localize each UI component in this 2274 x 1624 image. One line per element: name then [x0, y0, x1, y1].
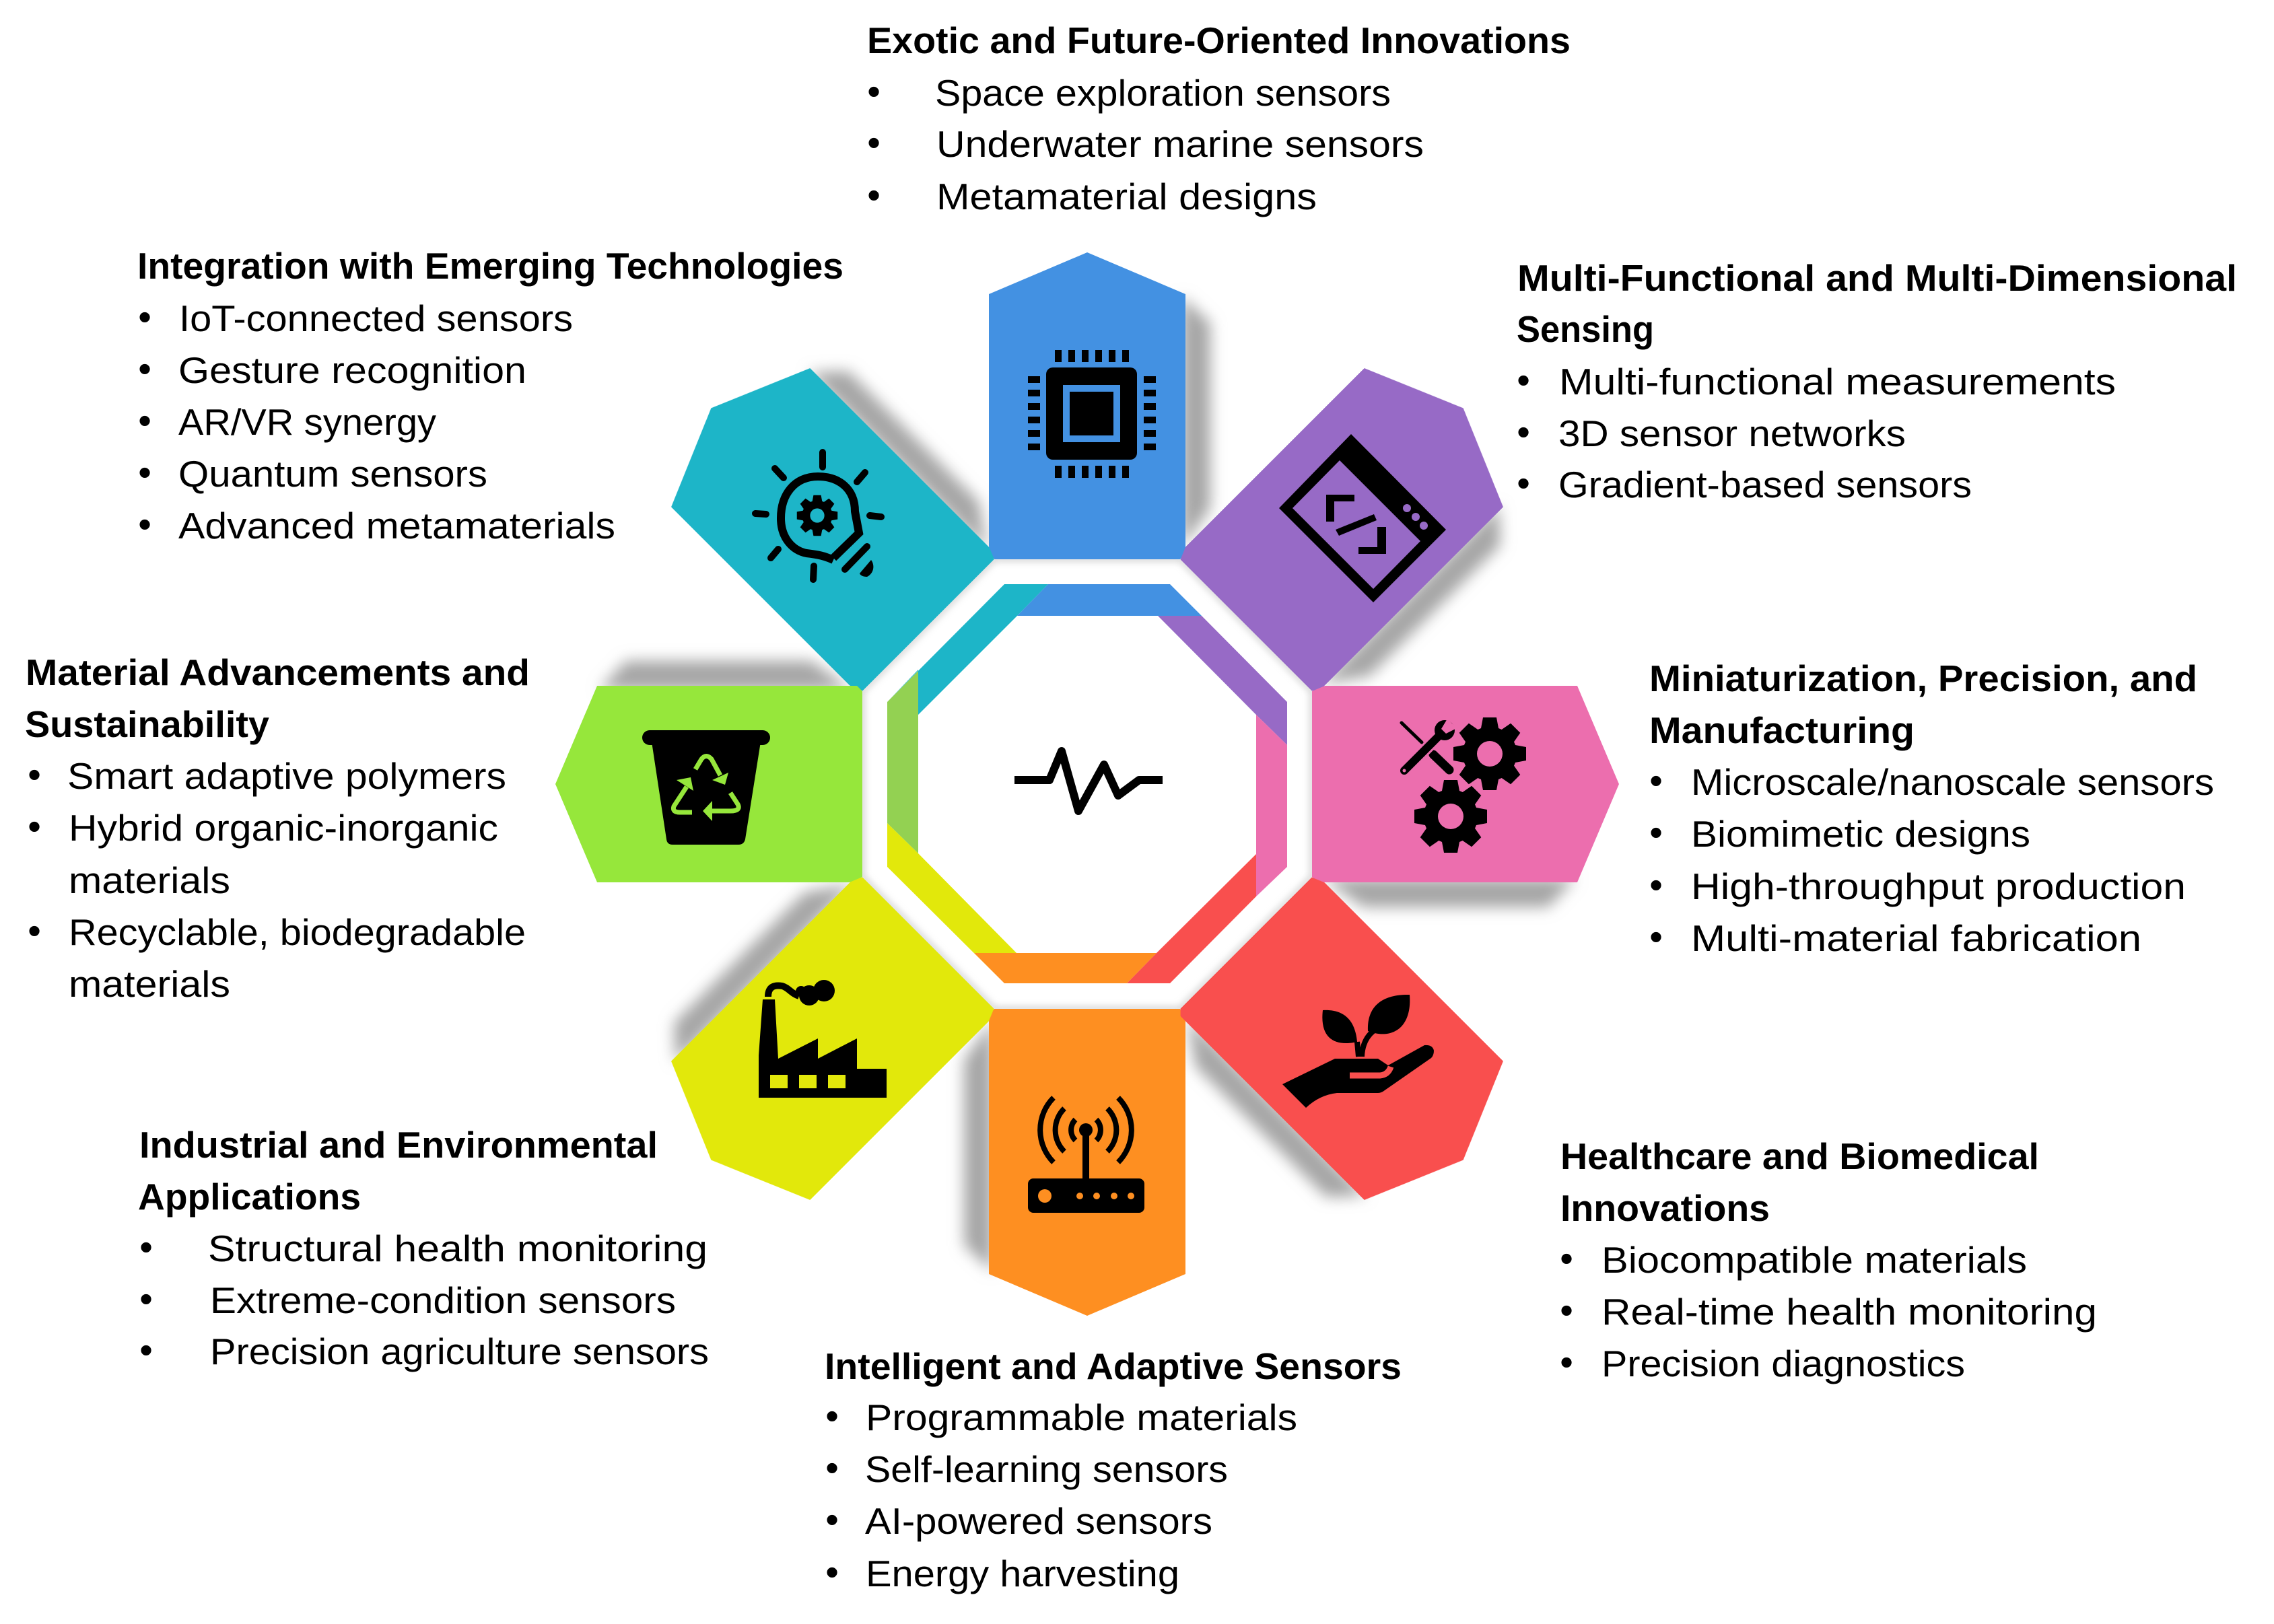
- text block: Material Advancements and Sustainability: •: [28, 805, 41, 847]
- text block: Exotic and Future-Oriented Innovations: [867, 20, 1571, 217]
- text block: Integration with Emerging Technologies: •: [138, 451, 151, 493]
- text block: Integration with Emerging Technologies: •: [138, 399, 151, 442]
- text block: Integration with Emerging Technologies: •: [138, 295, 151, 338]
- text block: Miniaturization, Precision, and Manufacturing: Multi-material fabrication: [1691, 917, 2141, 959]
- text block: Healthcare and Biomedical Innovations: Healthcare and Biomedical: [1560, 1135, 2039, 1177]
- text block: Material Advancements and Sustainability: Sustainability: [25, 703, 269, 745]
- text block: Intelligent and Adaptive Sensors: Intelligent and Adaptive Sensors: [825, 1345, 1402, 1387]
- text block: Industrial and Environmental Applications: Precision agriculture sensors: [210, 1331, 709, 1372]
- text block: Healthcare and Biomedical Innovations: •: [1560, 1341, 1573, 1383]
- text block: Integration with Emerging Technologies: Integration with Emerging Technologies: [137, 245, 843, 287]
- text block: Exotic and Future-Oriented Innovations: Exotic and Future-Oriented Innovations: [867, 20, 1571, 61]
- text block: Miniaturization, Precision, and Manufacturing: Microscale/nanoscale sensors: [1691, 761, 2214, 803]
- text block: Healthcare and Biomedical Innovations: Precision diagnostics: [1601, 1343, 1965, 1384]
- text block: Multi-Functional and Multi-Dimensional Sensing: •: [1517, 359, 1530, 401]
- icon: code window: [1279, 434, 1446, 602]
- text block: Exotic and Future-Oriented Innovations: Underwater marine sensors: [936, 123, 1424, 165]
- text block: Intelligent and Adaptive Sensors: •: [825, 1498, 839, 1541]
- text block: Intelligent and Adaptive Sensors: •: [825, 1446, 839, 1489]
- text block: Healthcare and Biomedical Innovations: Innovations: [1560, 1187, 1770, 1229]
- icon: wireless router: [1028, 1098, 1144, 1213]
- text block: Miniaturization, Precision, and Manufacturing: •: [1649, 863, 1663, 906]
- tile: yellow: [642, 874, 998, 1230]
- text block: Miniaturization, Precision, and Manufacturing: Manufacturing: [1649, 709, 1915, 751]
- icon: recycling bin: [642, 730, 770, 845]
- text block: Industrial and Environmental Applications: Extreme-condition sensors: [210, 1279, 676, 1321]
- icon: microchip: [1028, 350, 1156, 478]
- text block: Multi-Functional and Multi-Dimensional Sensing: •: [1517, 462, 1530, 504]
- tile: pink: [1312, 686, 1619, 882]
- text block: Healthcare and Biomedical Innovations: Real-time health monitoring: [1601, 1291, 2097, 1333]
- text block: Miniaturization, Precision, and Manufacturing: High-throughput production: [1691, 866, 2186, 907]
- text block: Exotic and Future-Oriented Innovations: •: [867, 174, 881, 216]
- text block: Industrial and Environmental Applications: •: [139, 1226, 153, 1268]
- text block: Material Advancements and Sustainability: Smart adaptive polymers: [67, 755, 506, 797]
- text block: Multi-Functional and Multi-Dimensional Sensing: Sensing: [1517, 308, 1654, 350]
- text block: Intelligent and Adaptive Sensors: Energy harvesting: [866, 1553, 1179, 1594]
- text block: Miniaturization, Precision, and Manufacturing: •: [1649, 811, 1663, 853]
- tile: green: [555, 686, 862, 882]
- text block: Material Advancements and Sustainability: Recyclable, biodegradable: [69, 911, 526, 953]
- text block: Material Advancements and Sustainability: •: [28, 909, 41, 952]
- text block: Integration with Emerging Technologies: Advanced metamaterials: [178, 505, 615, 546]
- text block: Industrial and Environmental Applications: •: [139, 1277, 153, 1320]
- icon: plant in hand: [1282, 995, 1434, 1108]
- text block: Integration with Emerging Technologies: •: [138, 347, 151, 390]
- text block: Industrial and Environmental Applications: Industrial and Environmental: [139, 1124, 658, 1166]
- icon: tools and gears: [1402, 717, 1526, 853]
- text block: Exotic and Future-Oriented Innovations: •: [867, 70, 881, 112]
- text block: Intelligent and Adaptive Sensors: AI-powered sensors: [865, 1500, 1212, 1542]
- tile: red: [1177, 874, 1533, 1230]
- text block: Integration with Emerging Technologies: IoT-connected sensors: [179, 297, 573, 339]
- text block: Material Advancements and Sustainability: materials: [69, 859, 230, 901]
- text block: Industrial and Environmental Applications: Applications: [138, 1176, 361, 1217]
- tile: purple: [1177, 339, 1533, 695]
- text block: Healthcare and Biomedical Innovations: [1560, 1135, 2097, 1384]
- text block: Integration with Emerging Technologies: AR/VR synergy: [178, 401, 437, 443]
- text block: Healthcare and Biomedical Innovations: •: [1560, 1237, 1573, 1279]
- text block: Integration with Emerging Technologies: •: [138, 503, 151, 545]
- text block: Healthcare and Biomedical Innovations: Biocompatible materials: [1601, 1239, 2027, 1281]
- text block: Intelligent and Adaptive Sensors: Self-learning sensors: [865, 1448, 1228, 1490]
- text block: Material Advancements and Sustainability: Material Advancements and: [26, 651, 530, 693]
- tile: blue: [989, 252, 1185, 559]
- text block: Material Advancements and Sustainability: Hybrid organic-inorganic: [69, 807, 498, 849]
- text block: Exotic and Future-Oriented Innovations: Space exploration sensors: [935, 72, 1391, 114]
- tile: teal: [642, 339, 998, 695]
- text block: Industrial and Environmental Applications: •: [139, 1329, 153, 1371]
- text block: Intelligent and Adaptive Sensors: •: [825, 1551, 839, 1593]
- text block: Healthcare and Biomedical Innovations: •: [1560, 1289, 1573, 1331]
- panel: inner octagon ring: [887, 584, 1287, 983]
- text block: Miniaturization, Precision, and Manufacturing: •: [1649, 759, 1663, 802]
- text block: Miniaturization, Precision, and Manufacturing: Miniaturization, Precision, and: [1649, 658, 2197, 699]
- text block: Material Advancements and Sustainability: •: [28, 753, 41, 796]
- text block: Miniaturization, Precision, and Manufacturing: [1649, 658, 2214, 959]
- text block: Integration with Emerging Technologies: Gesture recognition: [178, 349, 526, 391]
- icon: heartbeat pulse: [1014, 751, 1163, 811]
- text block: Multi-Functional and Multi-Dimensional Sensing: [1517, 257, 2237, 505]
- text block: Multi-Functional and Multi-Dimensional Sensing: •: [1517, 411, 1530, 453]
- text block: Miniaturization, Precision, and Manufacturing: •: [1649, 915, 1663, 958]
- icon: idea bulb with gear: [755, 452, 881, 579]
- text block: Multi-Functional and Multi-Dimensional Sensing: Gradient-based sensors: [1558, 464, 1972, 505]
- text block: Miniaturization, Precision, and Manufacturing: Biomimetic designs: [1691, 813, 2030, 855]
- text block: Intelligent and Adaptive Sensors: Programmable materials: [866, 1397, 1297, 1438]
- text block: Integration with Emerging Technologies: [137, 245, 843, 546]
- text block: Multi-Functional and Multi-Dimensional Sensing: 3D sensor networks: [1558, 413, 1906, 454]
- text block: Industrial and Environmental Applications: [138, 1124, 709, 1372]
- text block: Intelligent and Adaptive Sensors: [825, 1345, 1402, 1594]
- text block: Integration with Emerging Technologies: Quantum sensors: [178, 453, 487, 495]
- panel: wheel tiles: [555, 252, 1619, 1316]
- text block: Multi-Functional and Multi-Dimensional Sensing: Multi-functional measurements: [1559, 361, 2116, 402]
- text block: Industrial and Environmental Applications: Structural health monitoring: [208, 1228, 708, 1269]
- text block: Material Advancements and Sustainability: materials: [69, 963, 230, 1005]
- text block: Multi-Functional and Multi-Dimensional Sensing: Multi-Functional and Multi-Dimensional: [1517, 257, 2237, 299]
- icon: factory: [759, 980, 887, 1098]
- text block: Exotic and Future-Oriented Innovations: •: [867, 121, 881, 164]
- tile: orange: [989, 1009, 1185, 1316]
- text block: Material Advancements and Sustainability: [25, 651, 530, 1005]
- text block: Exotic and Future-Oriented Innovations: Metamaterial designs: [936, 176, 1317, 217]
- text block: Intelligent and Adaptive Sensors: •: [825, 1394, 839, 1437]
